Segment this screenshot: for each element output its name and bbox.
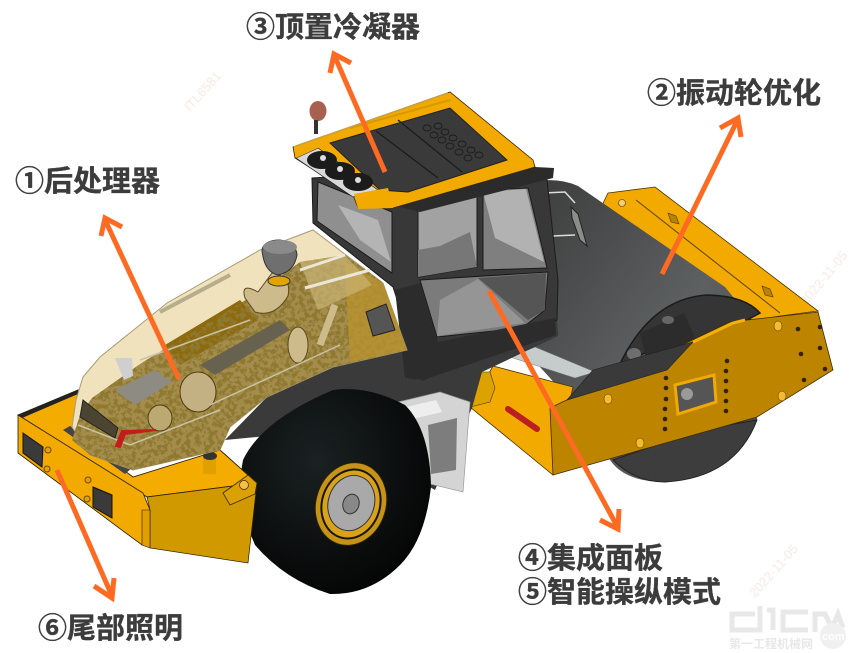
condenser tube holes	[423, 123, 483, 161]
sun visor bar	[392, 167, 554, 212]
tire	[241, 389, 431, 594]
filler cap	[203, 456, 216, 474]
lower chassis dark	[225, 320, 558, 490]
heading: integrated panel: ④集成面板	[518, 542, 663, 575]
hitch lug	[470, 372, 495, 407]
red handle	[508, 409, 537, 429]
cab side window	[317, 182, 392, 273]
roof with condenser	[293, 92, 535, 209]
watermark: faint date stamps	[181, 69, 850, 600]
rear lamp window	[366, 304, 395, 336]
counterweight	[18, 390, 257, 563]
drum roller	[530, 180, 760, 482]
watermark: faint date stamps: 2022-11-05	[797, 248, 850, 308]
tail lamps	[23, 433, 43, 467]
beacon light	[310, 101, 326, 134]
vibrator internals	[627, 313, 697, 360]
watermark logo	[729, 606, 846, 651]
front grille	[80, 400, 118, 438]
transparent hood with engine	[60, 225, 410, 475]
watermark logo: com	[822, 631, 845, 643]
heading: aftertreatment: ①后处理器	[15, 165, 160, 198]
watermark: faint date stamps: 2022-11-05	[746, 541, 801, 600]
white fitting	[115, 358, 133, 380]
arrow 4 to panel	[489, 291, 619, 529]
heading: drum optimisation: ②振动轮优化	[647, 77, 821, 110]
watermark logo: 第一工程机械网	[729, 636, 813, 651]
heading: rear lighting: ⑥尾部照明	[38, 612, 183, 645]
air filter	[262, 240, 297, 286]
condenser fans	[296, 148, 378, 197]
wheel hub	[305, 453, 397, 555]
watermark: faint date stamps: ITL6581	[181, 69, 224, 114]
cab door upper windows	[418, 195, 477, 277]
engine pipes	[78, 255, 370, 445]
side plate	[550, 312, 833, 475]
rear frame rail	[590, 187, 818, 330]
cab front lower frame	[395, 283, 556, 380]
drum slot	[571, 207, 587, 246]
translucent equipment box	[394, 392, 470, 492]
arrow 1 to aftertreatment	[101, 218, 179, 379]
side plate window	[675, 375, 716, 414]
cab lower window	[420, 272, 548, 337]
arrow 2 to drum	[662, 118, 741, 274]
arrow 6 to rear lights	[57, 470, 114, 598]
arrow 3 to condenser	[330, 54, 385, 172]
lower yellow block	[470, 347, 595, 475]
heading: smart control mode: ⑤智能操纵模式	[518, 576, 721, 609]
cab	[312, 165, 558, 380]
red marker	[116, 430, 156, 447]
heading: roof condenser: ③顶置冷凝器	[246, 11, 420, 44]
